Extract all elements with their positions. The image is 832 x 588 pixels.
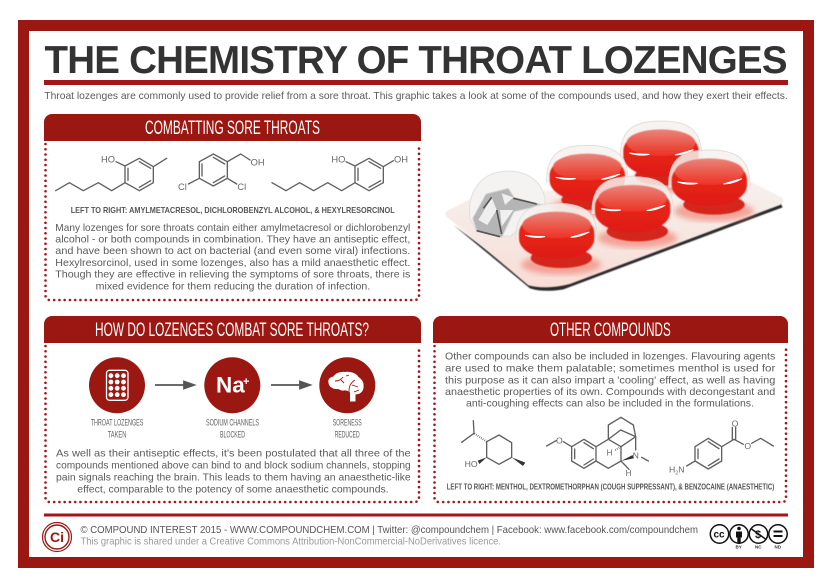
molecules: lozenge antiseptics [56,154,408,192]
body text [56,449,411,495]
dichlorobenzyl alcohol: Cl [237,182,246,192]
molecules: other compounds [462,417,773,478]
arrow [155,382,194,388]
body text: anti-coughing effects can also be included in the formulations. [466,399,754,410]
step labels: THROAT LOZENGES [91,418,143,428]
hexylresorcinol: HO [331,154,345,164]
dextromethorphan: H [607,449,613,458]
hexylresorcinol [272,154,408,191]
panel heading: OTHER COMPOUNDS [550,320,671,341]
body text [445,351,776,410]
body text: compounds mentioned above can bind to and block sodium channels, stopping [56,461,411,472]
body text: effect, comparable to the potency of some anaesthetic compounds. [77,484,389,495]
benzocaine: H [669,465,675,475]
body text: Though they are effective in relieving the symptoms of sore throats, there is [55,270,410,281]
body text: Other compounds can also be included in lozenges. Flavouring agents [445,351,775,362]
step labels: REDUCED [335,430,360,440]
body text: are used to make them palatable; sometimes menthol is used for [445,363,776,374]
body text: As well as their antiseptic effects, it's been postulated that all three of the [56,449,411,460]
panel: combatting sore throats [44,114,421,300]
panel heading: HOW DO LOZENGES COMBAT SORE THROATS? [95,320,369,341]
icons: creative commons licence: NC [755,544,762,550]
dextromethorphan [547,417,648,478]
dextromethorphan: H [626,469,632,478]
icons: creative commons licence [710,525,787,550]
panel: how do lozenges combat sore throats [44,316,421,502]
dichlorobenzyl alcohol [178,154,265,192]
pack shadow [453,203,783,291]
panel header: combatting sore throats [44,114,421,141]
dichlorobenzyl alcohol: Cl [178,182,187,192]
empty foil blister [469,171,545,237]
body text: Hexylresorcinol, used in some lozenges, also has a mild anaesthetic effect. [55,258,410,269]
benzocaine: 2 [675,470,678,476]
step labels [91,418,362,440]
step labels: BLOCKED [220,430,245,440]
body text: anaesthetic properties of its own. Compounds with decongestant and [445,387,776,398]
logo: compound interest [42,522,72,552]
footer credit: © COMPOUND INTEREST 2015 - WWW.COMPOUNDCHEM.COM | Twitter: @compoundchem | Facebook: www.facebook.com/compoundchem [80,525,698,536]
icons: creative commons licence: cc [714,530,725,540]
dichlorobenzyl alcohol: OH [251,158,265,168]
panel header [44,316,421,343]
amylmetacresol [56,154,167,191]
body text: Many lozenges for sore throats contain either amylmetacresol or dichlorobenzyl [55,223,410,234]
benzocaine: N [678,465,684,475]
menthol: HO [465,459,478,469]
icon: sodium: Na [216,373,245,398]
body text: pain signals reaching the brain. This leads to them having an anaesthetic-like [56,473,411,484]
dextromethorphan: O [556,435,563,445]
body text: mixed evidence for them reducing the duration of infection. [96,281,370,292]
panel heading: COMBATTING SORE THROATS [145,118,320,139]
icon: throat lozenges [89,357,145,413]
benzocaine [669,419,773,476]
pack [445,175,783,287]
logo: compound interest: Ci [50,529,64,545]
panel: other compounds [433,316,788,502]
lozenges [516,121,754,275]
title: THE CHEMISTRY OF THROAT LOZENGES [44,39,788,82]
licence note: This graphic is shared under a Creative Commons Attribution-NonCommercial-NoDerivatives licence. [80,536,501,548]
menthol [462,421,525,469]
step labels: TAKEN [108,430,126,440]
intro text: Throat lozenges are commonly used to provide relief from a sore throat. This graphic takes a look at some of the compounds used, and how they exert their effects. [44,91,788,102]
step labels: SORENESS [333,418,362,428]
footer rule [44,514,788,516]
benzocaine: O [732,419,739,429]
hexylresorcinol: OH [394,154,408,164]
icons: creative commons licence: $ [755,529,761,541]
icon: sodium: + [243,376,249,388]
step labels: SODIUM CHANNELS [206,418,259,428]
icon: brain [319,357,375,413]
body text [55,223,410,292]
arrow [271,382,310,388]
caption: LEFT TO RIGHT: AMYLMETACRESOL, DICHLOROBENZYL ALCOHOL, & HEXYLRESORCINOL [71,205,395,215]
icons: creative commons licence: ND [774,544,782,550]
body text: this purpose as it can also impart a 'cooling' effect, as well as having [445,375,776,386]
benzocaine: O [744,441,751,451]
dextromethorphan: N [633,450,639,460]
panel header [433,316,788,343]
dotted border [434,346,786,502]
dotted border [46,144,419,300]
dotted border [46,346,419,502]
title underline [44,80,788,85]
body text: and have been shown to act on bacterial (and even some viral) infections. [55,246,410,257]
body text: alcohol - or both compounds in combination. They have an antiseptic effect, [55,234,410,246]
photo: blister pack of red lozenges [445,121,783,291]
icon: sodium [204,357,260,413]
amylmetacresol: HO [101,154,115,164]
icons: creative commons licence: BY [736,544,742,550]
